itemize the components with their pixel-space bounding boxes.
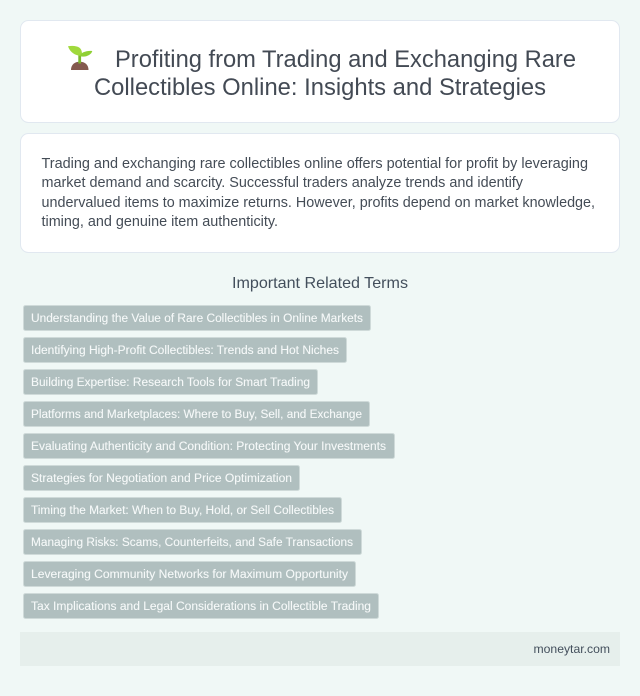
- chip: tax implications: [24, 594, 378, 618]
- footer: source text: moneytar.com: [534, 642, 610, 656]
- chip: negotiation strategies: [24, 466, 300, 490]
- chip: evaluating authenticity: Evaluating Authenticity and Condition: Protecting Your Investments: [31, 439, 386, 453]
- chip: managing risks: Managing Risks: Scams, Counterfeits, and Safe Transactions: [31, 535, 353, 549]
- text block: description: Trading and exchanging rare collectibles online offers potential for profit by leveraging: [42, 156, 588, 172]
- icon: seedling: [68, 46, 92, 70]
- title: [94, 46, 576, 101]
- chip: platforms and marketplaces: Platforms and Marketplaces: Where to Buy, Sell, and Exchange: [31, 407, 362, 421]
- chip: negotiation strategies: Strategies for Negotiation and Price Optimization: [31, 471, 292, 485]
- panel: title card: [20, 20, 620, 122]
- text block: description: market demand and scarcity. Successful traders analyze trends and identify: [42, 175, 524, 191]
- heading: important related terms: Important Related Terms: [232, 275, 408, 292]
- chip: building expertise: Building Expertise: Research Tools for Smart Trading: [31, 375, 310, 389]
- list: related term chips: [24, 306, 394, 618]
- title: Profiting from Trading and Exchanging Rare: [115, 46, 576, 73]
- chip: community networks: Leveraging Community Networks for Maximum Opportunity: [31, 567, 349, 581]
- footer: [20, 632, 620, 666]
- chip: understanding value: [24, 306, 370, 330]
- panel: description card: [20, 134, 620, 252]
- chip: understanding value: Understanding the Value of Rare Collectibles in Online Markets: [31, 311, 363, 325]
- chip: managing risks: [24, 530, 362, 554]
- text block: description: timing, and genuine item authenticity.: [42, 214, 278, 230]
- chip: platforms and marketplaces: [24, 402, 370, 426]
- chip: tax implications: Tax Implications and Legal Considerations in Collectible Trading: [31, 599, 371, 613]
- chip: timing the market: Timing the Market: When to Buy, Hold, or Sell Collectibles: [31, 503, 334, 517]
- chip: high-profit collectibles: [24, 338, 346, 362]
- chip: high-profit collectibles: Identifying High-Profit Collectibles: Trends and Hot Niches: [31, 343, 339, 357]
- text block: description: undervalued items to maximize returns. However, profits depend on market knowledge,: [42, 195, 595, 211]
- text block: description: [42, 156, 595, 230]
- chip: timing the market: [24, 498, 342, 522]
- chip: evaluating authenticity: [24, 434, 394, 458]
- chip: building expertise: [24, 370, 318, 394]
- chip: community networks: [24, 562, 356, 586]
- title: Collectibles Online: Insights and Strategies: [94, 74, 546, 101]
